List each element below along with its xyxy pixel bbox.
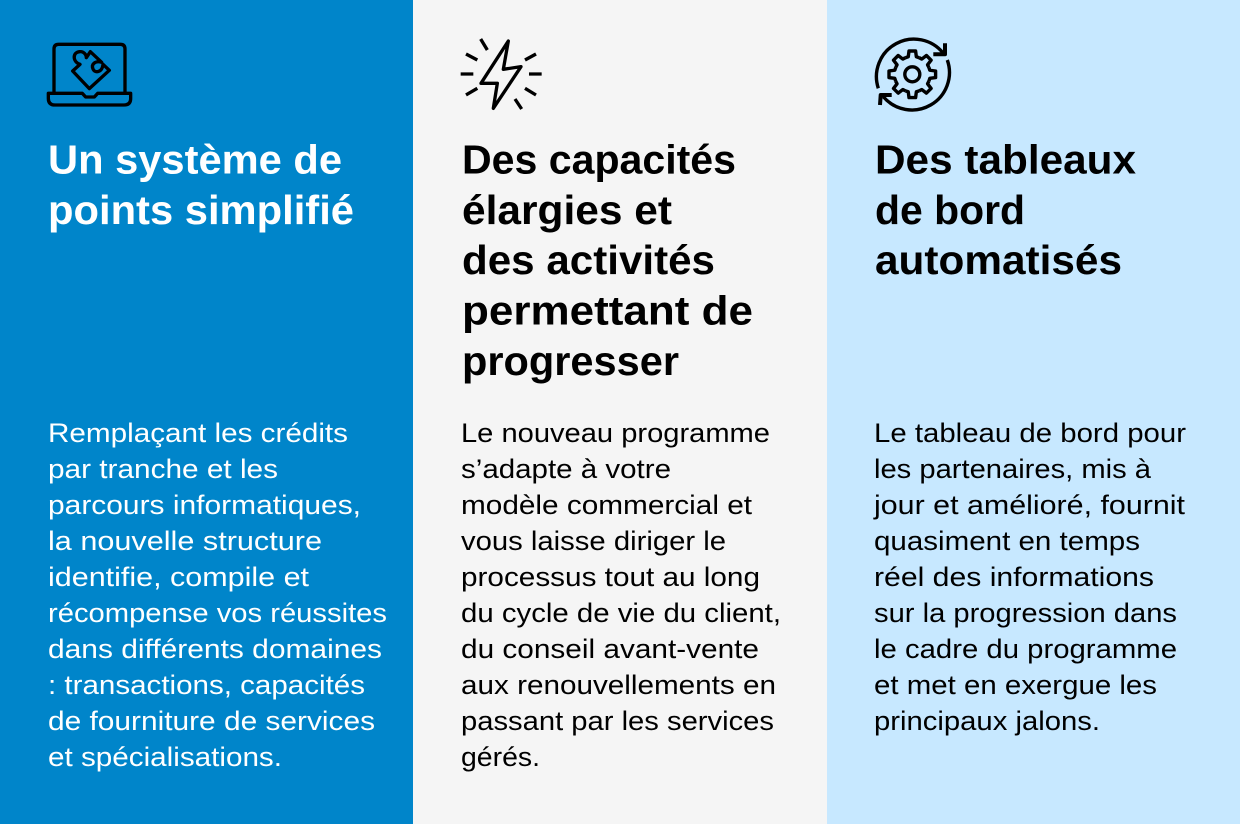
text block: description du système de points: : transactions, capacités xyxy=(48,670,365,700)
heading: des capacités élargies: progresser xyxy=(462,338,679,384)
text block: description des tableaux de bord: sur la progression dans xyxy=(874,598,1177,628)
text block: description des tableaux de bord: réel des informations xyxy=(874,562,1154,592)
text block: description des capacités xyxy=(461,418,781,772)
heading: un système de points simplifié: Un système de xyxy=(48,136,342,182)
heading: un système de points simplifié xyxy=(48,136,354,233)
text block: description des tableaux de bord: Le tableau de bord pour xyxy=(874,418,1186,448)
text block: description des capacités: modèle commercial et xyxy=(461,490,753,520)
text block: description des capacités: gérés. xyxy=(461,742,540,772)
text block: description du système de points: identifie, compile et xyxy=(48,562,310,592)
heading: des capacités élargies xyxy=(462,136,753,384)
text block: description du système de points: la nouvelle structure xyxy=(48,526,322,556)
text block: description du système de points: par tranche et les xyxy=(48,454,278,484)
heading: des capacités élargies: élargies et xyxy=(462,187,672,233)
text block: description des tableaux de bord: les partenaires, mis à xyxy=(874,454,1152,484)
text block: description du système de points: récompense vos réussites xyxy=(48,598,387,628)
icon: gear with circular arrows xyxy=(876,39,949,110)
text block: description des capacités: vous laisse diriger le xyxy=(461,526,726,556)
text block: description des tableaux de bord: jour et amélioré, fournit xyxy=(873,490,1186,520)
panel: des capacités élargies xyxy=(413,0,827,824)
heading: des tableaux de bord automatisés: automatisés xyxy=(875,237,1122,283)
text block: description des capacités: s’adapte à votre xyxy=(461,454,671,484)
text block: description du système de points: et spécialisations. xyxy=(48,742,282,772)
text block: description des capacités: processus tout au long xyxy=(461,562,760,592)
heading: des tableaux de bord automatisés: Des tableaux xyxy=(875,136,1136,182)
panel: des tableaux de bord automatisés xyxy=(827,0,1240,824)
heading: des tableaux de bord automatisés xyxy=(875,136,1136,283)
text block: description des tableaux de bord: et met en exergue les xyxy=(874,670,1157,700)
heading: des tableaux de bord automatisés: de bord xyxy=(875,187,1025,233)
text block: description des capacités: Le nouveau programme xyxy=(461,418,770,448)
heading: des capacités élargies: permettant de xyxy=(462,288,753,334)
heading: un système de points simplifié: points simplifié xyxy=(48,187,354,233)
text block: description du système de points: dans différents domaines xyxy=(48,634,382,664)
heading: des capacités élargies: Des capacités xyxy=(462,136,736,182)
icon: laptop with puzzle piece xyxy=(48,44,131,105)
text block: description du système de points: de fourniture de services xyxy=(48,706,375,736)
text block: description des capacités: aux renouvellements en xyxy=(461,670,776,700)
text block: description des tableaux de bord xyxy=(873,418,1186,736)
icon: lightning bolt with rays xyxy=(461,39,542,109)
heading: des capacités élargies: des activités xyxy=(462,237,715,283)
text block: description des tableaux de bord: le cadre du programme xyxy=(874,634,1177,664)
text block: description du système de points: Remplaçant les crédits xyxy=(48,418,348,448)
text block: description des tableaux de bord: quasiment en temps xyxy=(874,526,1140,556)
panel: un système de points simplifié xyxy=(0,0,413,824)
text block: description des capacités: du cycle de vie du client, xyxy=(461,598,781,628)
text block: description des capacités: du conseil avant-vente xyxy=(461,634,759,664)
text block: description des tableaux de bord: principaux jalons. xyxy=(874,706,1100,736)
text block: description du système de points: parcours informatiques, xyxy=(48,490,361,520)
text block: description des capacités: passant par les services xyxy=(461,706,774,736)
text block: description du système de points xyxy=(48,418,387,772)
